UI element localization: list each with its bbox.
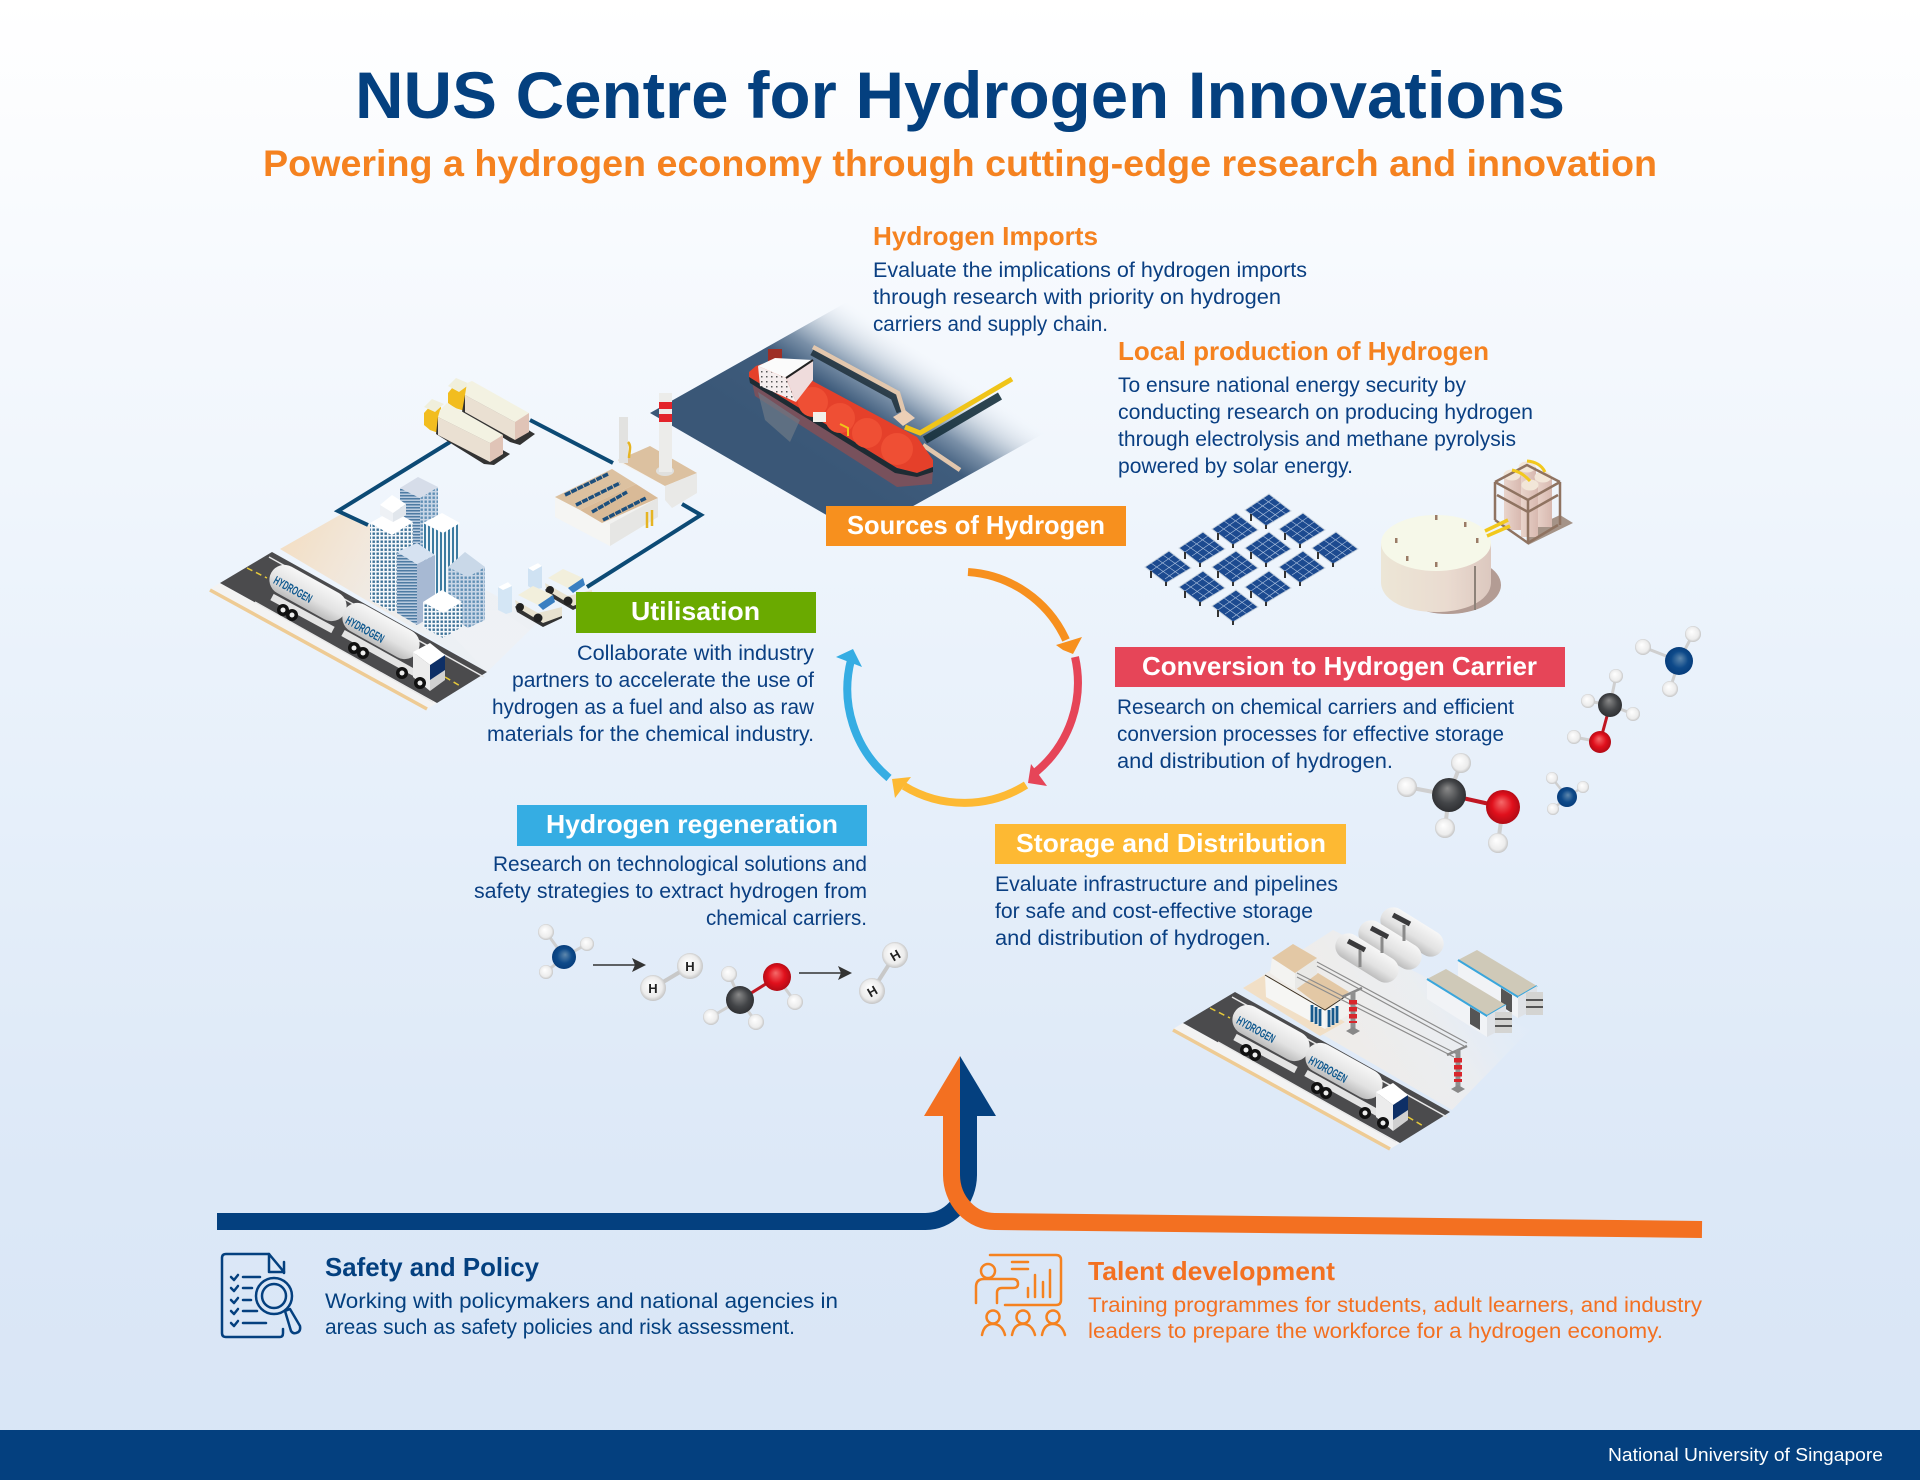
illustration: tanker ship at jetty	[650, 302, 1050, 535]
molecule: ammonia top right	[1635, 626, 1701, 697]
text: talent development: Training programmes for students, adult learners, and industry	[1088, 1293, 1702, 1317]
foundation arrow: safety and talent converge upward	[217, 1056, 1702, 1230]
text: utilisation: partners to accelerate the use of	[512, 668, 814, 692]
control building	[1265, 944, 1349, 1029]
illustration: solar panels	[1145, 494, 1358, 625]
storage capsules	[1330, 902, 1449, 988]
heading: hydrogen imports	[873, 221, 1307, 336]
heading: local production of hydrogen: through electrolysis and methane pyrolysis	[1118, 427, 1516, 451]
molecule reaction: methanol to hydrogen	[703, 942, 908, 1030]
text: regeneration: Research on technological solutions and	[493, 852, 867, 876]
truck label: HYDROGEN	[271, 573, 315, 606]
text: storage: for safe and cost-effective storage	[995, 899, 1313, 923]
molecule reaction: ammonia to hydrogen: H	[685, 959, 695, 974]
molecule reaction: methanol to hydrogen: H	[864, 983, 880, 1000]
text: storage: and distribution of hydrogen.	[995, 926, 1271, 950]
label: utilisation: Utilisation	[631, 596, 760, 626]
text: utilisation: hydrogen as a fuel and also as raw	[492, 695, 814, 719]
factory	[555, 393, 697, 546]
text: storage: Evaluate infrastructure and pipelines	[995, 872, 1338, 896]
heading: local production of hydrogen: powered by solar energy.	[1118, 454, 1353, 478]
heading: local production of hydrogen: Local production of Hydrogen	[1118, 336, 1489, 366]
arrow: storage to regeneration	[892, 777, 1026, 803]
truck label: HYDROGEN	[1306, 1053, 1350, 1086]
road and tanker truck	[210, 552, 487, 709]
molecule reaction: ammonia to hydrogen: H	[648, 981, 658, 996]
text: regeneration: chemical carriers.	[706, 906, 867, 930]
EV charging station	[498, 563, 592, 627]
text: conversion: Research on chemical carriers and efficient	[1117, 695, 1514, 719]
text: regeneration	[474, 852, 867, 930]
text: utilisation: materials for the chemical industry.	[487, 722, 814, 746]
arrow: regeneration to utilisation	[836, 649, 889, 778]
icon: policy document with magnifier	[222, 1254, 300, 1337]
label: conversion to hydrogen carrier: Conversion to Hydrogen Carrier	[1142, 651, 1537, 681]
molecule reaction: ammonia to hydrogen	[538, 924, 703, 1001]
arrow: conversion to storage	[1028, 657, 1078, 786]
text: utilisation: Collaborate with industry	[577, 641, 814, 665]
arrow: sources to conversion	[968, 572, 1082, 654]
heading: hydrogen imports: Hydrogen Imports	[873, 221, 1098, 251]
site buildings	[1427, 950, 1543, 1037]
text: regeneration: safety strategies to extract hydrogen from	[474, 879, 867, 903]
text: safety and policy	[325, 1252, 838, 1339]
text: conversion: conversion processes for effective storage	[1117, 722, 1504, 746]
text: safety and policy: areas such as safety policies and risk assessment.	[325, 1315, 795, 1339]
label: hydrogen regeneration: Hydrogen regeneration	[546, 809, 838, 839]
text: utilisation	[487, 641, 814, 746]
subtitle: Powering a hydrogen economy through cutting-edge research and innovation	[263, 143, 1657, 184]
text: safety and policy: Safety and Policy	[325, 1252, 540, 1282]
heading: hydrogen imports: Evaluate the implications of hydrogen imports	[873, 258, 1307, 282]
molecule: methanol top right	[1567, 669, 1640, 753]
cycle arrows	[836, 572, 1082, 803]
label: storage and distribution	[995, 824, 1346, 864]
molecule: ammonia small	[1546, 772, 1589, 815]
power lines and pylons	[1297, 962, 1467, 1093]
city buildings	[370, 477, 485, 638]
heading: local production of hydrogen: To ensure national energy security by	[1118, 373, 1466, 397]
text: talent development	[1088, 1256, 1702, 1343]
heading: local production of hydrogen: conducting research on producing hydrogen	[1118, 400, 1533, 424]
label: sources of hydrogen	[826, 506, 1126, 546]
text: talent development: Talent development	[1088, 1256, 1335, 1286]
yellow delivery trucks	[424, 378, 535, 465]
road and tanker truck	[1173, 992, 1450, 1149]
text: talent development: leaders to prepare the workforce for a hydrogen economy.	[1088, 1319, 1663, 1343]
illustration: hydrogen storage tank and reformer	[1381, 461, 1573, 614]
network lines	[338, 420, 701, 587]
truck label: HYDROGEN	[1234, 1013, 1278, 1046]
label: sources of hydrogen: Sources of Hydrogen	[847, 510, 1105, 540]
text: safety and policy: Working with policymakers and national agencies in	[325, 1289, 838, 1313]
label: conversion to hydrogen carrier	[1115, 647, 1565, 687]
molecule reaction: methanol to hydrogen: H	[887, 947, 903, 964]
label: storage and distribution: Storage and Distribution	[1016, 828, 1326, 858]
footer bar	[0, 1430, 1920, 1480]
heading: local production of hydrogen	[1118, 336, 1533, 478]
molecule: methanol large	[1397, 753, 1520, 853]
title: NUS Centre for Hydrogen Innovations	[355, 58, 1565, 132]
heading: hydrogen imports: carriers and supply chain.	[873, 312, 1108, 336]
text: conversion	[1117, 695, 1514, 773]
text: conversion: and distribution of hydrogen.	[1117, 749, 1393, 773]
label: utilisation	[576, 592, 816, 633]
truck label: HYDROGEN	[343, 613, 387, 646]
heading: hydrogen imports: through research with priority on hydrogen	[873, 285, 1281, 309]
illustration: city, factory, trucks, EV chargers	[210, 378, 701, 709]
icon: training presentation	[976, 1255, 1065, 1335]
text: storage	[995, 872, 1338, 950]
label: hydrogen regeneration	[517, 805, 867, 846]
footer bar: National University of Singapore	[1608, 1445, 1883, 1465]
illustration: hydrogen storage and distribution site	[1173, 902, 1543, 1149]
